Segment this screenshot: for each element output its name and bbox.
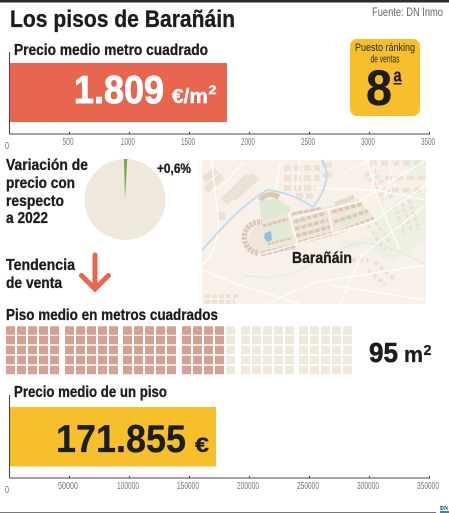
axis labels: 3000	[361, 136, 375, 148]
pond	[264, 231, 272, 242]
axis labels: 100000	[117, 480, 139, 492]
heading: average flat price: Precio medio de un piso	[14, 384, 167, 401]
unit: euros: €	[195, 434, 209, 457]
axis labels: 3500	[421, 136, 435, 148]
pale river tributary	[243, 243, 426, 277]
text: sales trend label	[6, 257, 75, 292]
panel: average flat price chart	[5, 384, 439, 496]
axis labels: 0	[5, 484, 9, 496]
axis labels	[5, 480, 439, 496]
axis labels: 1000	[121, 136, 135, 148]
map label: Barañáin	[292, 250, 352, 267]
text: price variation label: precio con	[6, 175, 75, 192]
callout: sales ranking: 8	[366, 60, 392, 116]
axis labels: 2500	[301, 136, 315, 148]
inner park	[262, 222, 292, 246]
text: price variation label	[6, 157, 88, 227]
axis labels: 200000	[237, 480, 259, 492]
value: 95 square metres	[369, 337, 432, 368]
bar: price per square metre	[9, 63, 227, 122]
panel: price per square metre chart	[5, 42, 435, 152]
value: +0,6%: +0,6%	[157, 160, 191, 176]
callout: sales ranking: de ventas	[370, 54, 400, 66]
axis labels: 300000	[357, 480, 379, 492]
north arc buildings	[260, 195, 279, 200]
heading: price per square metre: Precio medio metro cuadrado	[14, 42, 208, 59]
pale surrounding blocks	[204, 163, 426, 302]
north park	[259, 198, 290, 221]
value: 95 square metres: 2	[424, 342, 432, 359]
axis lines	[10, 395, 430, 478]
streets and roads	[202, 160, 426, 304]
heading: average flat size: Piso medio en metros cuadrados	[6, 307, 218, 324]
arrow: sales trend down	[82, 255, 108, 289]
unit: euros per square metre: €/m	[172, 86, 208, 108]
axis labels: 0	[5, 140, 9, 152]
axis labels: 500	[62, 136, 74, 148]
map: Barañáin	[202, 160, 426, 304]
title: Los pisos de Barañáin	[10, 6, 235, 33]
value: 95 square metres: m	[404, 342, 423, 367]
callout: sales ranking: Puesto ránking	[355, 42, 415, 54]
value: 95 square metres: 95	[369, 337, 398, 368]
value: 171.855 euros: 171.855	[56, 418, 186, 461]
text: price variation label: Variación de	[6, 157, 88, 174]
axis labels: 1500	[181, 136, 195, 148]
river	[202, 160, 327, 250]
pie chart: price variation	[84, 159, 166, 240]
unit: euros per square metre	[172, 83, 217, 108]
axis labels: 2000	[241, 136, 255, 148]
text: sales trend label: de venta	[6, 275, 62, 292]
residential area base	[248, 199, 375, 254]
axis labels	[5, 136, 435, 152]
callout: sales ranking: a	[394, 66, 402, 86]
axis lines	[10, 52, 430, 134]
east park	[340, 208, 368, 226]
axis labels: 150000	[177, 480, 199, 492]
unit: euros per square metre: 2	[208, 83, 217, 97]
text: price variation label: respecto	[6, 193, 64, 210]
text: sales trend label: Tendencia	[6, 257, 75, 274]
callout: sales ranking	[350, 39, 420, 116]
text: price variation label: a 2022	[6, 210, 48, 227]
pale green surroundings	[340, 160, 426, 262]
axis labels: 50000	[58, 480, 78, 492]
bar: average flat price	[9, 407, 216, 466]
axis labels: 250000	[297, 480, 319, 492]
waffle chart: 95 of 150 square metres	[6, 330, 352, 370]
streets through residential area	[262, 200, 375, 254]
value: 1.809 euros per square metre: 1.809	[74, 69, 164, 112]
residential blocks	[244, 197, 374, 254]
